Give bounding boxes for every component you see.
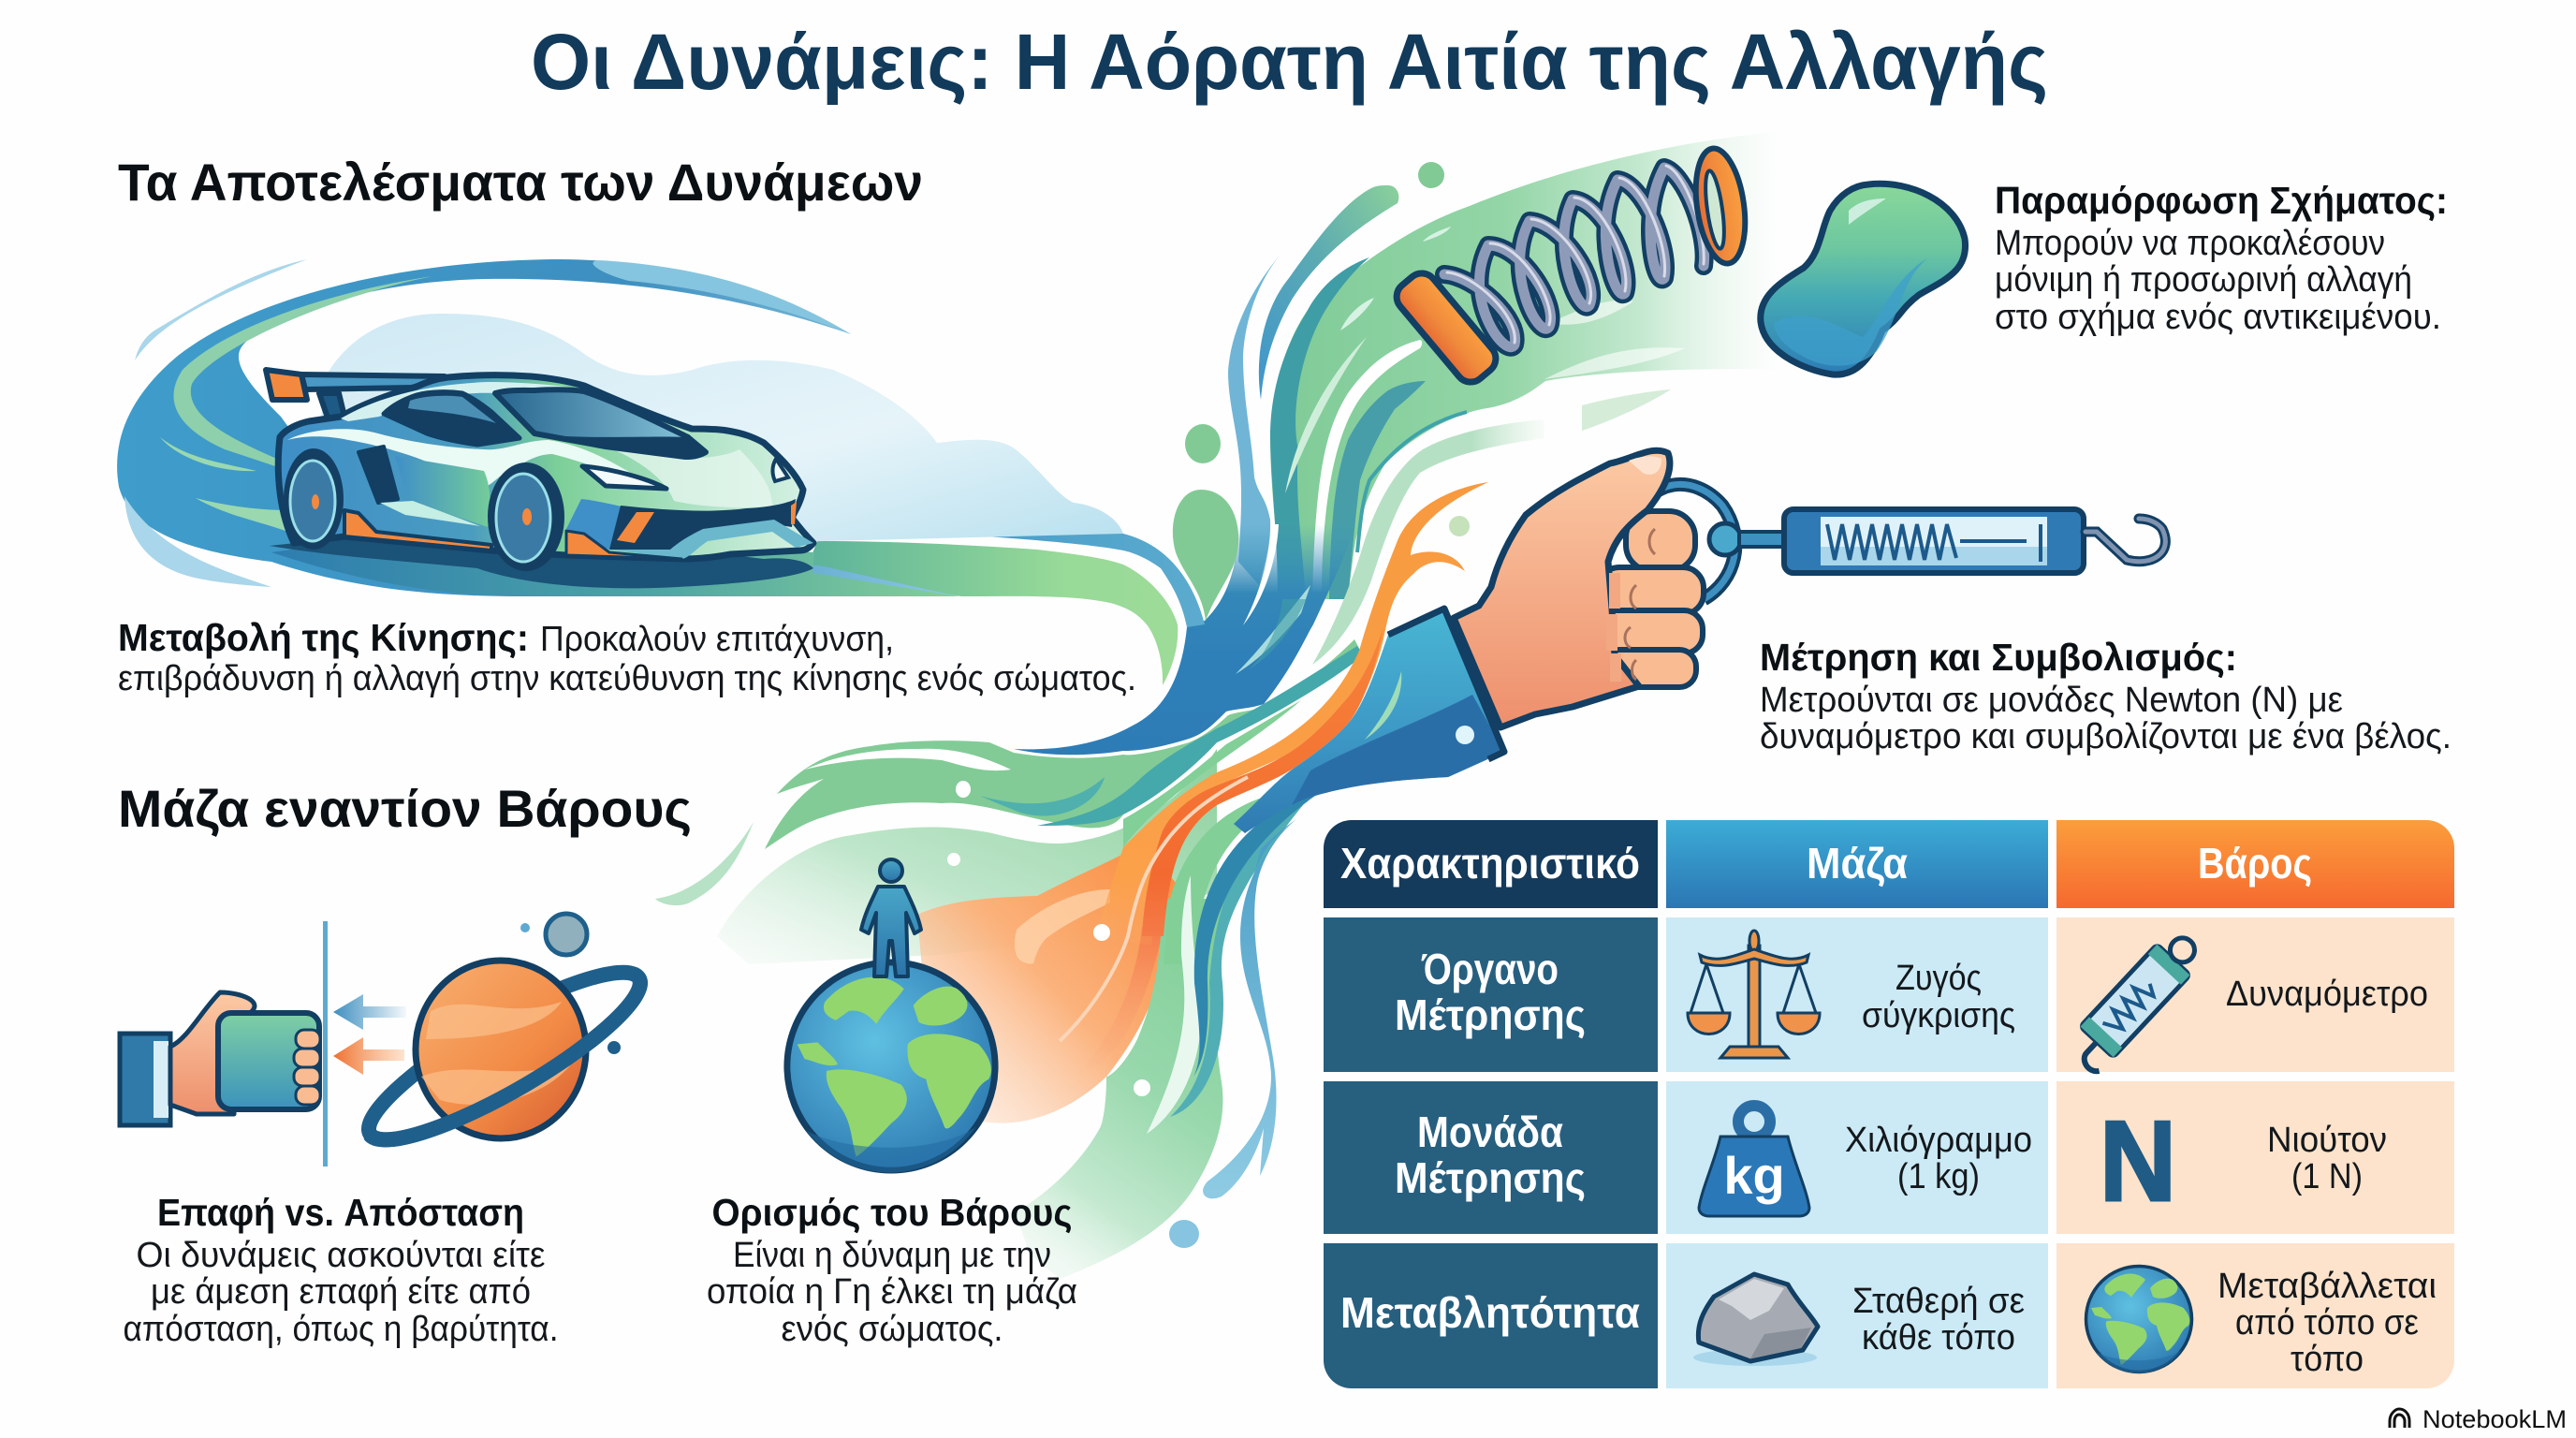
- row label: instrument: Μέτρησης: [1395, 990, 1586, 1039]
- illustration: hand with dynamometer: [1234, 450, 2165, 833]
- row label: instrument: [1324, 917, 1658, 1072]
- planet ring back: [352, 947, 657, 1165]
- flow: pale streak on orange: [1060, 777, 1248, 1041]
- row label: unit: Μονάδα: [1417, 1108, 1563, 1156]
- swirl: pale light strip: [135, 259, 307, 360]
- cell: dynamometer: [2056, 917, 2454, 1076]
- cloud backdrop: [300, 314, 1123, 543]
- icon: kg weight: [1699, 1106, 1809, 1216]
- flow: droplet: [1169, 1220, 1199, 1248]
- sleeve crescent: [1365, 671, 1401, 740]
- flow: green dots: [1185, 424, 1221, 463]
- cuff button: [1456, 726, 1474, 744]
- swirl: underside gradient: [271, 524, 959, 596]
- car headlight: [582, 466, 666, 489]
- text: change of motion: Προκαλούν επιτάχυνση,: [540, 620, 894, 659]
- arrow blue: [333, 994, 406, 1030]
- header: characteristic: Χαρακτηριστικό: [1340, 839, 1640, 888]
- comparison table: [1324, 820, 2454, 1388]
- flow: blue stripe beside green: [1193, 796, 1315, 1077]
- sleeve blending into blue flow: [1234, 609, 1504, 833]
- spoiler: [266, 370, 445, 423]
- icon: tilted dynamometer: [2063, 926, 2207, 1076]
- flow: green teardrop: [1173, 490, 1238, 621]
- flow: pale green ribbon: [1312, 419, 1544, 665]
- swirl: outer blue: [117, 259, 959, 596]
- icon: earth with person: [787, 859, 995, 1173]
- hand palm and thumb: [1454, 450, 1670, 727]
- car hood highlight: [608, 448, 772, 507]
- flow: thin teal edge: [1357, 412, 1467, 552]
- cell: balance: [1666, 917, 2048, 1072]
- spring disc lower: [1391, 267, 1501, 389]
- flow: white streak: [1312, 340, 1422, 599]
- cell: newton: Νιούτον: [2267, 1121, 2387, 1160]
- finger tips: [294, 1030, 320, 1105]
- dynamometer ring: [1633, 484, 1735, 599]
- dynamometer hook: [2086, 519, 2165, 562]
- text: contact versus distance: Επαφή vs. Απόσταση: [157, 1191, 524, 1234]
- cell: dynamometer: Δυναμόμετρο: [2226, 975, 2428, 1014]
- car side vent: [359, 447, 398, 503]
- header: weight: [2056, 820, 2454, 908]
- flow: blue band from car: [803, 517, 1205, 627]
- icon: small earth: [2086, 1266, 2192, 1373]
- text: deformation: Μπορούν να προκαλέσουν: [1995, 224, 2385, 263]
- swirl: lower left crescent: [124, 496, 271, 587]
- moon: [546, 914, 587, 955]
- car shoulder highlight: [287, 429, 646, 488]
- flow: right sliver: [1254, 819, 1296, 873]
- flow: teal stripe beside blue: [1170, 796, 1310, 1117]
- row label: variability: Μεταβλητότητα: [1340, 1288, 1640, 1337]
- text: change of motion: επιβράδυνση ή αλλαγή στην κατεύθυνση της κίνησης ενός σώματος.: [118, 659, 1136, 698]
- notebooklm logo: NotebookLM: [2422, 1405, 2567, 1433]
- flow: pale orange swoosh: [1015, 889, 1110, 964]
- flow: white streak in tail: [1147, 875, 1201, 1134]
- fingers: [1594, 511, 1704, 687]
- text: contact versus distance: [124, 1191, 558, 1349]
- car orange skirt: [344, 510, 491, 550]
- cell: varies: τόπο: [2291, 1340, 2364, 1379]
- car roof light: [341, 382, 580, 421]
- flow: light blue lower ribbon: [1203, 819, 1296, 1198]
- title: Οι Δυνάμεις: Η Αόρατη Αιτία της Αλλαγής: [531, 18, 2048, 106]
- section heading: effects of forces: Τα Αποτελέσματα των Δυνάμεων: [118, 153, 923, 212]
- flow: white line in main ribbon: [1243, 524, 1279, 625]
- flow: main blue ribbon: [1014, 524, 1354, 755]
- text: definition of weight: Ορισμός του Βάρους: [711, 1191, 1073, 1234]
- illustration: car with motion swirl: [117, 259, 1123, 596]
- text: deformation: [1995, 179, 2448, 337]
- cell: varies: από τόπο σε: [2235, 1303, 2419, 1343]
- flow: orange glow behind earth: [917, 843, 1181, 1123]
- car orange vent: [617, 512, 654, 543]
- car side window: [384, 392, 520, 445]
- text: deformation: Παραμόρφωση Σχήματος:: [1995, 179, 2448, 222]
- flow: top green-blue ribbon: [1259, 185, 1398, 400]
- header: mass: [1666, 820, 2048, 908]
- dynamometer neck: [1709, 523, 1741, 555]
- flow: light orange ribbon and flame: [1095, 482, 1488, 946]
- sleeve dark lower panel: [1292, 695, 1504, 805]
- text: change of motion: [118, 616, 1136, 698]
- flow: pale tip left: [655, 822, 754, 905]
- cell: constant: κάθε τόπο: [1862, 1318, 2015, 1357]
- row label: unit: Μέτρησης: [1395, 1153, 1586, 1202]
- cell: newton: (1 N): [2291, 1157, 2363, 1196]
- car body: [278, 375, 813, 559]
- flow: small teal swoosh: [980, 777, 1105, 816]
- hand: [170, 992, 255, 1114]
- dots: [520, 923, 530, 932]
- text: deformation: στο σχήμα ενός αντικειμένου.: [1995, 298, 2441, 337]
- flow: green wing behind spring: [1270, 131, 1783, 599]
- text: change of motion: Μεταβολή της Κίνησης:: [118, 616, 529, 659]
- barrier line: [323, 921, 328, 1167]
- text: measurement and symbolism: [1760, 636, 2452, 756]
- flow: green wave band: [765, 639, 1363, 849]
- text: measurement and symbolism: Μέτρηση και Συμβολισμός:: [1760, 636, 2237, 679]
- car grille: [609, 499, 796, 550]
- cell: varies: Μεταβάλλεται: [2217, 1267, 2437, 1306]
- icon: contact versus distance: [120, 914, 657, 1167]
- spring disc upper: [1690, 145, 1751, 267]
- flow: white streaks across wing: [1544, 301, 1685, 379]
- row label: unit: [1324, 1081, 1658, 1234]
- icon: deformable blob: [1761, 183, 1966, 374]
- flow: pale streak: [1285, 337, 1367, 493]
- flow: teal stripe in wave: [1037, 646, 1363, 826]
- icon: kg weight: kg: [1723, 1146, 1785, 1205]
- cell: kilogram: Χιλιόγραμμο: [1845, 1121, 2032, 1160]
- car door panel: [395, 456, 490, 527]
- cell: balance: σύγκρισης: [1862, 996, 2015, 1035]
- cuff: [120, 1034, 170, 1125]
- planet: [416, 961, 586, 1138]
- text: measurement and symbolism: δυναμόμετρο και συμβολίζονται με ένα βέλος.: [1760, 717, 2452, 756]
- earth globe: [787, 962, 995, 1173]
- front wheel: [488, 462, 564, 571]
- text: measurement and symbolism: Μετρούνται σε μονάδες Newton (N) με: [1760, 681, 2343, 720]
- text: deformation: μόνιμη ή προσωρινή αλλαγή: [1995, 260, 2412, 300]
- car front lip: [609, 520, 813, 559]
- cell: newton: [2056, 1081, 2454, 1234]
- cell: constant: [1666, 1243, 2048, 1388]
- dynamometer body: [1784, 509, 2084, 573]
- central force flow swirl: [655, 131, 1783, 1279]
- flow: salmon fade below dark orange: [1076, 927, 1164, 1077]
- flow: white dots: [956, 781, 971, 798]
- flow: pale streak in main ribbon: [1236, 585, 1310, 674]
- car shadow: [270, 524, 813, 588]
- planet ring front: [370, 977, 640, 1139]
- cell: balance: Ζυγός: [1895, 959, 1982, 998]
- cell: varies: [2056, 1243, 2454, 1388]
- section heading: mass versus weight: Μάζα εναντίον Βάρους: [118, 779, 692, 838]
- arrow orange: [333, 1037, 404, 1075]
- flow: dark orange ribbon: [1142, 627, 1383, 936]
- flow: green stripe beside orange: [1164, 799, 1273, 964]
- held box: [218, 1013, 319, 1109]
- spring coil: [1444, 166, 1705, 347]
- cell: kilogram: [1666, 1081, 2048, 1234]
- text: definition of weight: [707, 1191, 1077, 1349]
- cell: constant: Σταθερή σε: [1852, 1282, 2025, 1321]
- text: definition of weight: οποία η Γη έλκει τη μάζα: [707, 1272, 1077, 1312]
- flow: teal band in main ribbon: [1250, 599, 1306, 669]
- flow: light blue ribbon: [1228, 256, 1280, 585]
- flow: teal ribbon second: [1329, 381, 1426, 599]
- flow: white cut in wave: [805, 749, 1011, 770]
- row label: instrument: Όργανο: [1421, 945, 1559, 993]
- icon: rock: [1693, 1274, 1818, 1366]
- car front blue panel: [566, 499, 637, 550]
- text: definition of weight: Είναι η δύναμη με την: [733, 1236, 1051, 1275]
- icon: N letter: N: [2100, 1097, 2176, 1225]
- car side light: [772, 459, 788, 481]
- dynamometer spring: [1827, 524, 2041, 562]
- cell: kilogram: (1 kg): [1897, 1157, 1980, 1196]
- text: contact versus distance: με άμεση επαφή είτε από: [151, 1272, 531, 1312]
- text: contact versus distance: απόσταση, όπως η βαρύτητα.: [124, 1310, 558, 1349]
- header: weight: Βάρος: [2198, 839, 2312, 888]
- sleeve edge outline: [1388, 609, 1504, 759]
- icon: spring: [1391, 145, 1751, 389]
- flow: small streaks: [1340, 227, 1451, 330]
- row label: variability: [1324, 1243, 1658, 1388]
- car windshield: [495, 389, 706, 457]
- flow: pale chip: [1582, 389, 1671, 431]
- flow: teal strip: [1270, 257, 1369, 599]
- rear wheel: [284, 448, 344, 550]
- header: mass: Μάζα: [1807, 839, 1908, 888]
- person: [861, 859, 921, 976]
- knuckle marks: [1625, 529, 1655, 680]
- swirl: thin green streak: [173, 276, 432, 468]
- flow: lower green tail: [1016, 899, 1229, 1279]
- text: definition of weight: ενός σώματος.: [781, 1310, 1003, 1349]
- text: contact versus distance: Οι δυνάμεις ασκούνται είτε: [137, 1236, 546, 1275]
- icon: balance scale: [1688, 931, 1820, 1058]
- flow: green below white line: [1123, 700, 1301, 847]
- car lower light panel: [380, 501, 480, 526]
- flow: green road from car: [805, 541, 1178, 685]
- flow: lower pale green area behind person: [717, 749, 1217, 964]
- header: characteristic: [1324, 820, 1658, 908]
